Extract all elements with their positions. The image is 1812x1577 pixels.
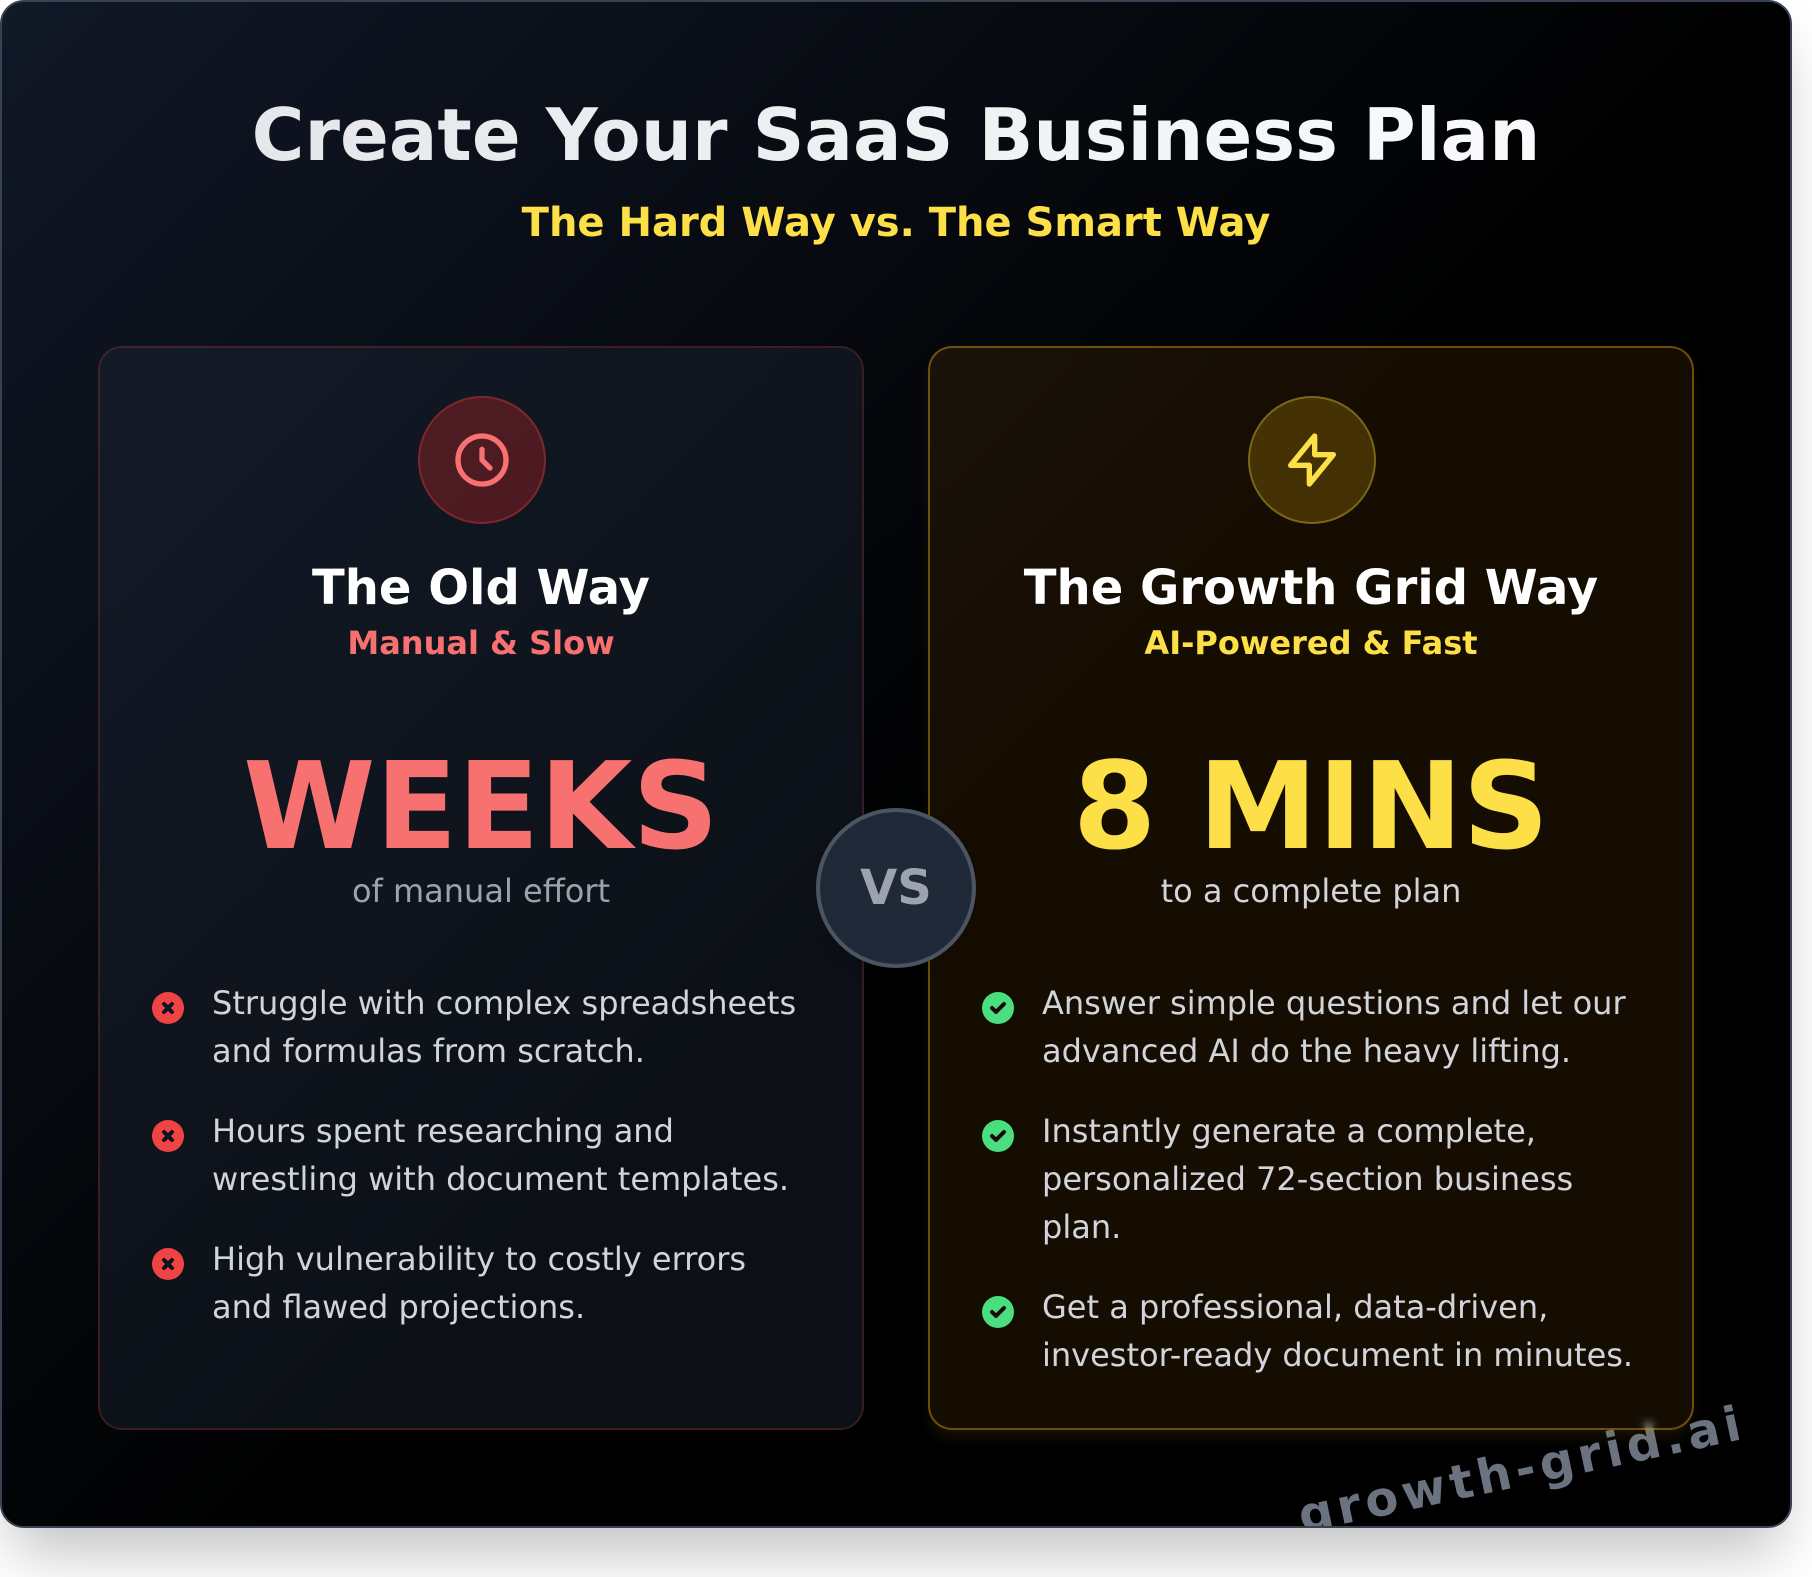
benefit 1: advanced AI do the heavy lifting. xyxy=(1042,1032,1571,1070)
drawback 3 xyxy=(152,1240,746,1326)
big stat: 8 mins: 8 MINS xyxy=(1073,738,1549,877)
benefit 1 xyxy=(982,984,1626,1070)
benefit 3: investor-ready document in minutes. xyxy=(1042,1336,1633,1374)
benefit 2: Instantly generate a complete, xyxy=(1042,1112,1536,1150)
benefit 3: Get a professional, data-driven, xyxy=(1042,1288,1548,1326)
benefit 2 xyxy=(982,1112,1573,1246)
old way tagline: Manual & Slow xyxy=(347,624,615,662)
old way heading: The Old Way xyxy=(312,560,650,616)
growth grid heading: The Growth Grid Way xyxy=(1024,560,1598,616)
stat caption: to a complete plan xyxy=(1161,872,1461,910)
big stat: weeks: WEEKS xyxy=(243,738,719,877)
vs badge: VS xyxy=(860,860,932,916)
drawback 2: Hours spent researching and xyxy=(212,1112,674,1150)
icon: clock xyxy=(418,396,546,524)
benefit 3 xyxy=(982,1288,1633,1374)
drawback 3: High vulnerability to costly errors xyxy=(212,1240,746,1278)
subtitle: The Hard Way vs. The Smart Way xyxy=(522,200,1270,246)
panel: the old way xyxy=(98,346,864,1430)
panel: the growth grid way xyxy=(928,346,1694,1430)
drawback 3: and flawed projections. xyxy=(212,1288,585,1326)
title xyxy=(2,95,1790,175)
stat caption: of manual effort xyxy=(352,872,610,910)
drawback 1 xyxy=(152,984,796,1070)
growth grid tagline: AI-Powered & Fast xyxy=(1144,624,1478,662)
benefit 2: personalized 72-section business xyxy=(1042,1160,1573,1198)
drawback 1: and formulas from scratch. xyxy=(212,1032,645,1070)
drawback 2 xyxy=(152,1112,789,1198)
icon: lightning bolt xyxy=(1248,396,1376,524)
benefit 2: plan. xyxy=(1042,1208,1121,1246)
drawback 2: wrestling with document templates. xyxy=(212,1160,789,1198)
title: Create Your SaaS Business Plan xyxy=(252,93,1540,177)
benefit 1: Answer simple questions and let our xyxy=(1042,984,1626,1022)
drawback 1: Struggle with complex spreadsheets xyxy=(212,984,796,1022)
vs badge xyxy=(816,808,976,968)
